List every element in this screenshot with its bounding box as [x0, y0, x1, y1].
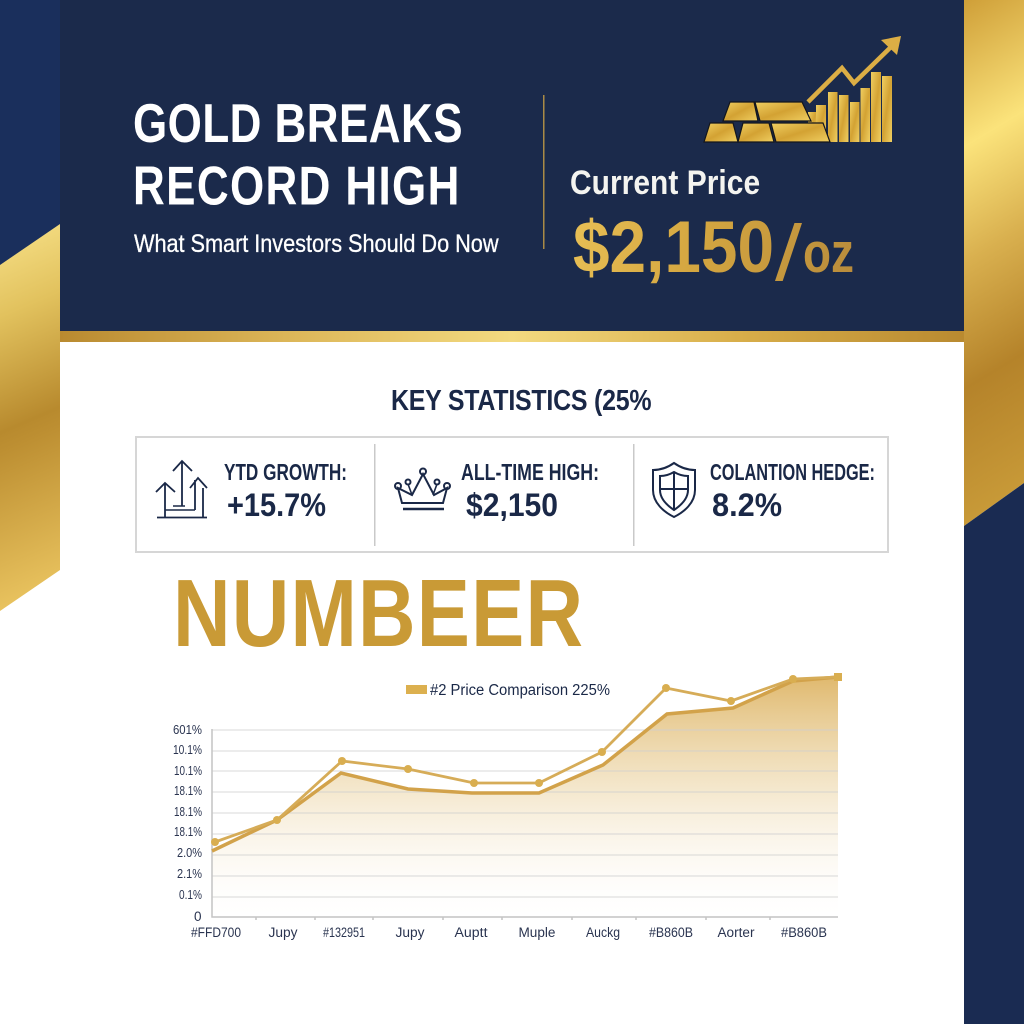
- y axis labels: 0: [194, 909, 202, 924]
- y axis labels: 18.1%: [174, 804, 202, 819]
- x axis labels: #B860B: [781, 925, 827, 940]
- subtitle: What Smart Investors Should Do Now: [134, 230, 499, 257]
- y axis labels: 601%: [173, 722, 202, 737]
- y axis labels: 0.1%: [179, 887, 202, 902]
- stat: all-time high: ALL-TIME HIGH:: [461, 459, 599, 485]
- x axis labels: Auckg: [586, 925, 620, 940]
- stat: all-time high: [461, 459, 599, 523]
- header vertical divider: [543, 95, 544, 249]
- main gold line: [212, 677, 838, 851]
- x axis labels: Muple: [518, 925, 556, 940]
- x axis labels: [191, 925, 827, 940]
- panel: left side ribbon: [0, 0, 60, 611]
- y axis labels: 2.1%: [177, 866, 202, 881]
- stat: all-time high: $2,150: [466, 487, 558, 523]
- gridlines: [212, 730, 838, 897]
- title: RECORD HIGH: [133, 155, 459, 217]
- y axis labels: 10.1%: [174, 763, 202, 778]
- heading: key statistics: KEY STATISTICS (25%: [391, 384, 652, 416]
- stat: YTD growth: [224, 459, 347, 523]
- title: GOLD BREAKS: [133, 92, 463, 154]
- current price value: $2,150: [573, 207, 774, 288]
- y axis labels: 18.1%: [174, 783, 202, 798]
- panel: navy header: [60, 0, 964, 331]
- x axis labels: #B860B: [649, 925, 693, 940]
- x axis labels: Aorter: [718, 925, 755, 940]
- panel: right side ribbon: [964, 0, 1024, 1024]
- y axis labels: 18.1%: [174, 824, 202, 839]
- icon: gold bars and growth chart: [704, 36, 901, 142]
- current price value: oz: [803, 221, 854, 285]
- x axis labels: #132951: [323, 925, 365, 940]
- stat: coalition hedge: [710, 459, 875, 523]
- stat: coalition hedge: COLANTION HEDGE:: [710, 459, 875, 485]
- title: [133, 92, 463, 217]
- y axis labels: 10.1%: [173, 742, 202, 757]
- stat: YTD growth: +15.7%: [227, 487, 326, 523]
- chart legend: #2 Price Comparison 225%: [430, 682, 610, 699]
- y axis labels: [173, 722, 202, 924]
- big gold word: NUMBEER: [173, 559, 583, 667]
- icon: growth arrows: [156, 461, 207, 518]
- area fill under main line: [212, 677, 838, 917]
- line chart: [173, 673, 842, 940]
- x axis labels: Jupy: [396, 925, 425, 940]
- current price label: Current Price: [570, 163, 760, 201]
- comparison line with markers: [211, 673, 842, 846]
- icon: crown: [395, 468, 450, 509]
- current price value: /: [775, 208, 802, 297]
- x axis labels: #FFD700: [191, 925, 241, 940]
- x axis labels: Auptt: [454, 925, 488, 940]
- icon: shield: [653, 463, 695, 517]
- panel: statistics row: [136, 437, 888, 552]
- axes: [212, 729, 838, 920]
- stat: YTD growth: YTD GROWTH:: [224, 459, 347, 485]
- x axis labels: Jupy: [268, 925, 298, 940]
- stat: coalition hedge: 8.2%: [712, 487, 782, 523]
- divider: gold band under header: [60, 331, 964, 342]
- y axis labels: 2.0%: [177, 845, 202, 860]
